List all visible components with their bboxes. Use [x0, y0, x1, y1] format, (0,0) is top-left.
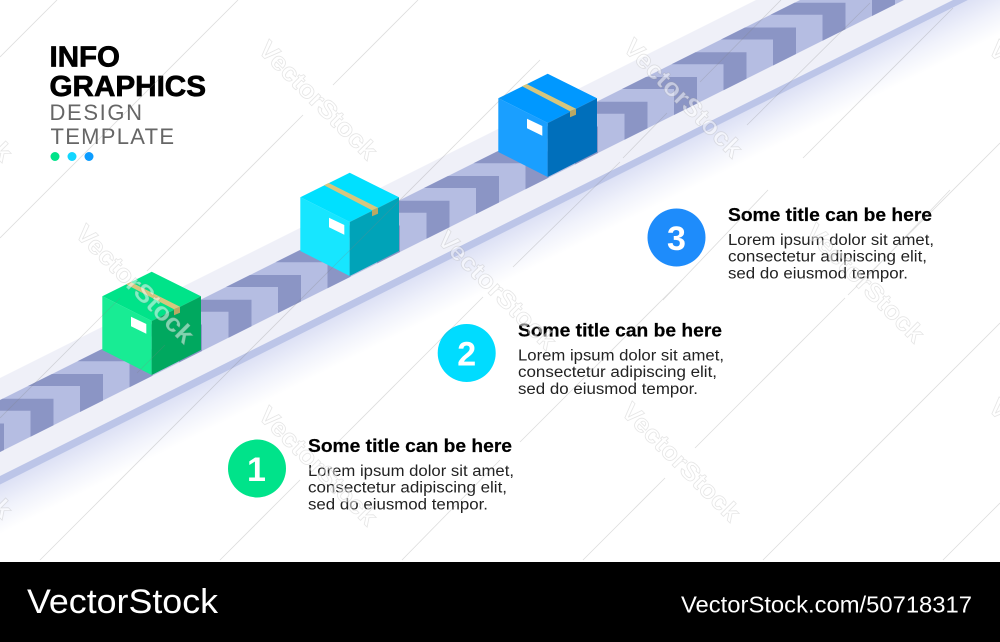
- watermark text: VectorStock: [800, 218, 930, 348]
- step 2 text: consectetur adipiscing elit,: [518, 364, 717, 381]
- step 2 text: Lorem ipsum dolor sit amet,: [518, 348, 724, 365]
- lower rail: [0, 0, 953, 476]
- watermark text: VectorStock: [432, 225, 562, 355]
- title block: [50, 42, 206, 161]
- watermark text: VectorStock: [253, 401, 383, 531]
- step 2: [438, 320, 724, 398]
- footer image id: VectorStock.com/50718317: [681, 592, 972, 618]
- step 1 text: [308, 436, 514, 514]
- subtitle: DESIGN TEMPLATE: [50, 100, 174, 149]
- step 1 number badge: 1: [247, 451, 266, 489]
- watermark text: VectorStock: [616, 397, 746, 527]
- upper rail: [0, 0, 800, 400]
- subtitle: DESIGN TEMPLATE: TEMPLATE: [50, 124, 174, 149]
- step 3 text: sed do eiusmod tempor.: [728, 266, 908, 282]
- step 3 text: consectetur adipiscing elit,: [728, 248, 927, 266]
- watermark text: [0, 33, 1000, 531]
- watermark text: VectorStock: [253, 35, 383, 165]
- step 2 text: [518, 320, 724, 398]
- step 2 text: Some title can be here: [518, 320, 722, 340]
- step 3 text: Some title can be here: [728, 205, 932, 225]
- title: INFO GRAPHICS: GRAPHICS: [50, 71, 206, 103]
- title: INFO GRAPHICS: INFO: [50, 42, 120, 74]
- belt surface: [0, 0, 904, 452]
- step 1 text: consectetur adipiscing elit,: [308, 480, 507, 496]
- step 2 number badge: 2: [457, 336, 476, 374]
- step 3 number badge: [648, 208, 706, 266]
- step 3: [648, 205, 934, 282]
- step 3 text: [728, 205, 934, 282]
- subtitle: DESIGN TEMPLATE: DESIGN: [50, 100, 142, 125]
- footer bar: [0, 562, 1000, 642]
- step 3 text: Lorem ipsum dolor sit amet,: [728, 232, 934, 249]
- step 1 text: Some title can be here: [308, 436, 512, 456]
- cyan box: [300, 173, 399, 276]
- step 1: [228, 436, 514, 514]
- conveyor side face: [0, 0, 1000, 484]
- green box: [102, 272, 201, 375]
- footer logo text: VectorStock: [27, 583, 219, 621]
- step 3 number badge: 3: [667, 220, 686, 258]
- step 1 text: sed do eiusmod tempor.: [308, 496, 488, 514]
- three colour dots: [50, 152, 94, 161]
- step 1 number badge: [228, 440, 286, 498]
- watermark text: VectorStock: [618, 33, 748, 163]
- belt chevrons: [0, 0, 895, 486]
- step 2 text: sed do eiusmod tempor.: [518, 381, 698, 398]
- step 2 number badge: [438, 324, 496, 382]
- watermark text: VectorStock: [70, 219, 200, 349]
- title: INFO GRAPHICS: [50, 42, 206, 103]
- blue box: [498, 74, 597, 177]
- step 1 text: Lorem ipsum dolor sit amet,: [308, 463, 514, 480]
